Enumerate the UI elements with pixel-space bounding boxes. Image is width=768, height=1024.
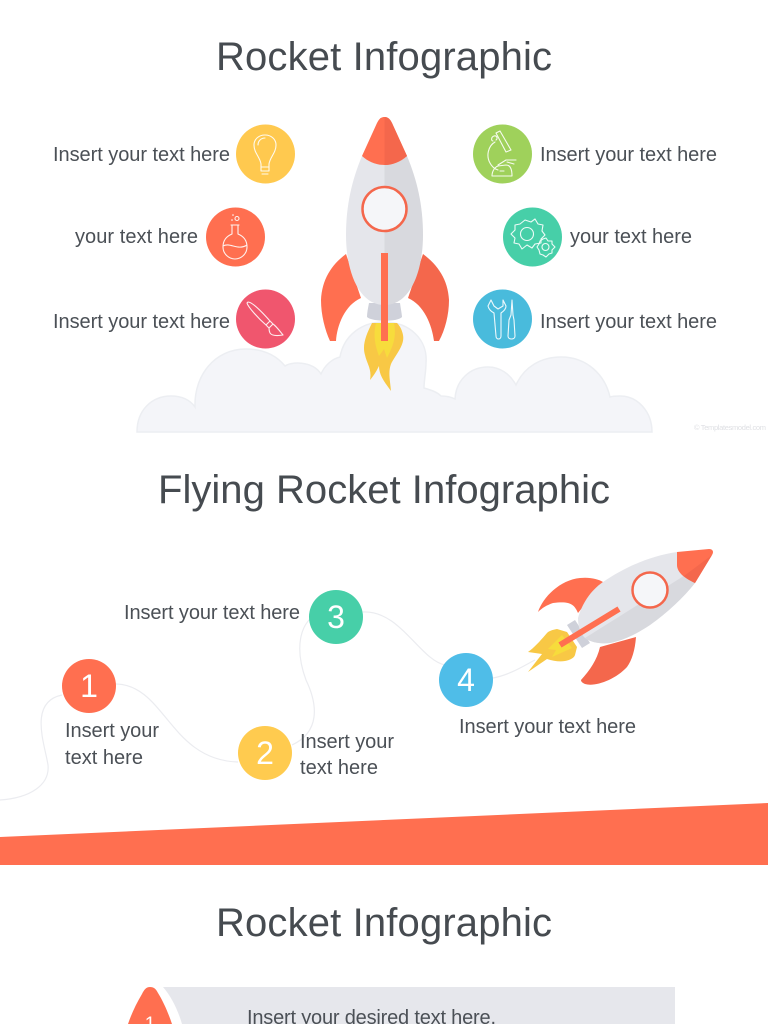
label: Insert your text here	[53, 144, 230, 166]
flight path	[0, 612, 535, 800]
label: text here	[65, 747, 143, 769]
centre bar	[560, 609, 619, 645]
step 3	[124, 590, 363, 644]
item: tools	[473, 290, 717, 348]
number badge	[439, 653, 493, 707]
icon: wrench and screwdriver	[473, 290, 532, 348]
item: gears	[503, 208, 692, 266]
icon: flask	[206, 208, 265, 266]
step 4	[439, 653, 636, 738]
red nose badge	[128, 987, 172, 1024]
icon: light bulb	[236, 124, 295, 184]
label: Insert your text here	[540, 311, 717, 333]
label: Insert your text here	[53, 311, 230, 333]
watermark: © Templatesmodel.com	[694, 423, 766, 432]
rocket	[321, 117, 449, 391]
item: paint brush	[53, 290, 295, 348]
number badge: 1	[80, 668, 98, 704]
flying rocket	[528, 549, 713, 685]
title: Rocket Infographic	[216, 35, 552, 79]
label: text here	[300, 757, 378, 779]
label: your text here	[75, 226, 198, 248]
rocket right fin	[408, 254, 449, 341]
rocket nozzle	[367, 303, 402, 321]
rocket flame	[364, 323, 403, 391]
flame	[528, 629, 577, 672]
item: light bulb	[53, 124, 295, 184]
number badge	[309, 590, 363, 644]
icon: paint brush	[236, 290, 295, 348]
rocket nose	[362, 117, 407, 165]
step 2	[238, 726, 394, 780]
label: Insert your text here	[540, 144, 717, 166]
rocket left fin	[321, 254, 361, 341]
rocket window	[362, 187, 406, 231]
item: flask	[75, 208, 265, 266]
lower fin	[581, 637, 636, 685]
label: Insert your	[300, 731, 394, 753]
number badge	[238, 726, 292, 780]
label: Insert your	[65, 720, 159, 742]
icon: microscope	[473, 124, 532, 184]
label: Insert your text here	[459, 716, 636, 738]
label: your text here	[570, 226, 692, 248]
item: microscope	[473, 124, 717, 184]
title: Rocket Infographic	[216, 901, 552, 945]
upper fin	[538, 578, 603, 613]
window	[632, 572, 668, 608]
icon: gears	[503, 208, 562, 266]
rocket centre bar	[381, 253, 388, 341]
step 1	[62, 659, 159, 769]
number badge: 2	[256, 735, 274, 771]
grey text panel	[163, 987, 675, 1024]
rocket body	[346, 156, 384, 305]
orange ground band	[0, 803, 768, 865]
number badge: 4	[457, 662, 475, 698]
cloud	[137, 322, 652, 432]
section 3: rocket infographic list	[128, 901, 675, 1024]
nozzle	[567, 620, 590, 648]
section 1: rocket infographic	[53, 35, 766, 432]
label: Insert your text here	[124, 602, 300, 624]
nose	[677, 549, 713, 583]
title: Flying Rocket Infographic	[158, 468, 610, 512]
body	[578, 552, 695, 643]
section 2: flying rocket infographic	[0, 468, 768, 865]
number badge: 3	[327, 599, 345, 635]
